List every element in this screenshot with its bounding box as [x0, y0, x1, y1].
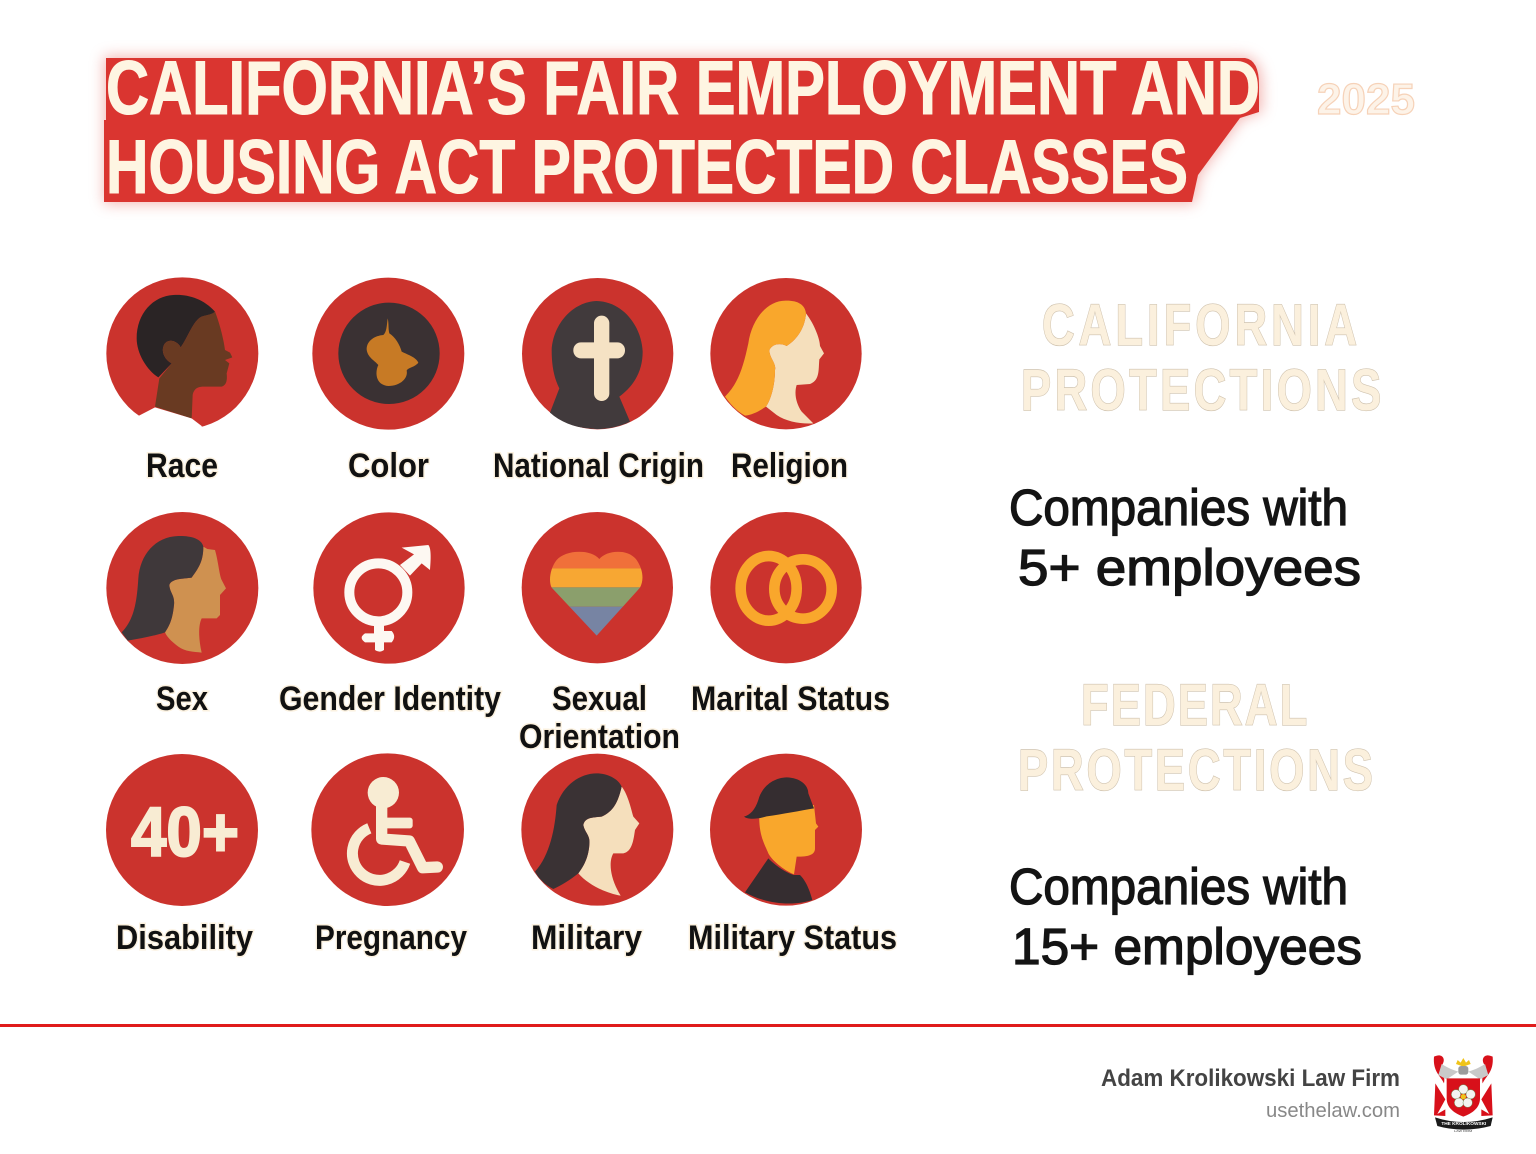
- icon: religion: [710, 278, 862, 429]
- text: 5+ employees: 5+ employees: [1018, 539, 1361, 596]
- label: Gender Identity: Gender Identity: [279, 680, 501, 718]
- text: 5+ employees: Companies with: [1009, 479, 1348, 536]
- logo: coat of arms: [1434, 1055, 1493, 1133]
- label: Disability: Disability: [116, 919, 253, 957]
- label: National Crigin: National Crigin: [493, 447, 704, 485]
- footer: website: usethelaw.com: [1266, 1100, 1400, 1122]
- title banner: [104, 46, 1262, 210]
- logo: coat of arms: LAW FIRM: [1454, 1129, 1473, 1133]
- item: Military: [521, 754, 673, 957]
- label: Sexual Orientation: Orientation: [519, 718, 680, 756]
- item: Gender Identity: [279, 512, 501, 718]
- item: Color: [312, 278, 464, 485]
- title line 2: HOUSING ACT PROTECTED CLASSES: [106, 125, 1188, 210]
- item: Military Status: [688, 754, 897, 957]
- label: Race: Race: [146, 447, 218, 485]
- text: 15+ employees: 15+ employees: [1012, 918, 1362, 975]
- label: Military Status: Military Status: [688, 919, 897, 957]
- item: Sex: [106, 512, 258, 718]
- heading: Federal protections: FEDERAL: [1081, 674, 1307, 738]
- item: Sexual Orientation: [519, 512, 680, 756]
- panel: California protections: [1009, 294, 1381, 596]
- footer: firm name: Adam Krolikowski Law Firm: [1101, 1065, 1400, 1092]
- label: Marital Status: Marital Status: [691, 680, 890, 718]
- label: Color: Color: [348, 447, 429, 485]
- icon: 40+ badge: 40+: [131, 793, 239, 871]
- heading: Federal protections: PROTECTIONS: [1018, 739, 1373, 803]
- label: Military: Military: [531, 919, 642, 957]
- item: National Crigin: [493, 278, 704, 485]
- icon: sex: [106, 512, 258, 664]
- label: Sexual Orientation: [519, 680, 680, 756]
- heading: California protections: [1021, 294, 1381, 423]
- heading: Federal protections: [1018, 674, 1373, 803]
- item: Race: [106, 277, 258, 485]
- label: Sexual Orientation: Sexual: [552, 680, 647, 718]
- text: 15+ employees: Companies with: [1009, 858, 1348, 915]
- icon: color: [312, 278, 464, 430]
- panel: Federal protections: [1009, 674, 1373, 975]
- heading: California protections: CALIFORNIA: [1042, 294, 1357, 358]
- label: Religion: Religion: [731, 447, 848, 485]
- year label: 2025: [1317, 75, 1415, 124]
- logo: coat of arms: THE KROLIKOWSKI: [1441, 1121, 1486, 1126]
- icon: wheelchair: [311, 753, 464, 906]
- item: Disability: [106, 754, 258, 957]
- icon: rainbow heart: [522, 512, 673, 663]
- heading: California protections: PROTECTIONS: [1021, 359, 1381, 423]
- label: Pregnancy: Pregnancy: [315, 919, 467, 957]
- text: 15+ employees: [1009, 858, 1362, 975]
- icon: gender symbol: [313, 512, 465, 664]
- panel: protected classes grid: [106, 277, 897, 957]
- item: Pregnancy: [311, 753, 467, 957]
- icon: cross in head: [522, 278, 673, 429]
- icon: person in cap: [710, 754, 862, 906]
- icon: race: [106, 277, 258, 437]
- icon: wedding rings: [710, 512, 862, 663]
- text: 5+ employees: [1009, 479, 1361, 596]
- label: Sex: Sex: [156, 680, 208, 718]
- item: Religion: [710, 278, 862, 485]
- item: Marital Status: [691, 512, 890, 718]
- title line 1: CALIFORNIA’S FAIR EMPLOYMENT AND: [106, 46, 1260, 131]
- icon: 40+ badge: [106, 754, 258, 906]
- icon: military woman: [521, 754, 673, 906]
